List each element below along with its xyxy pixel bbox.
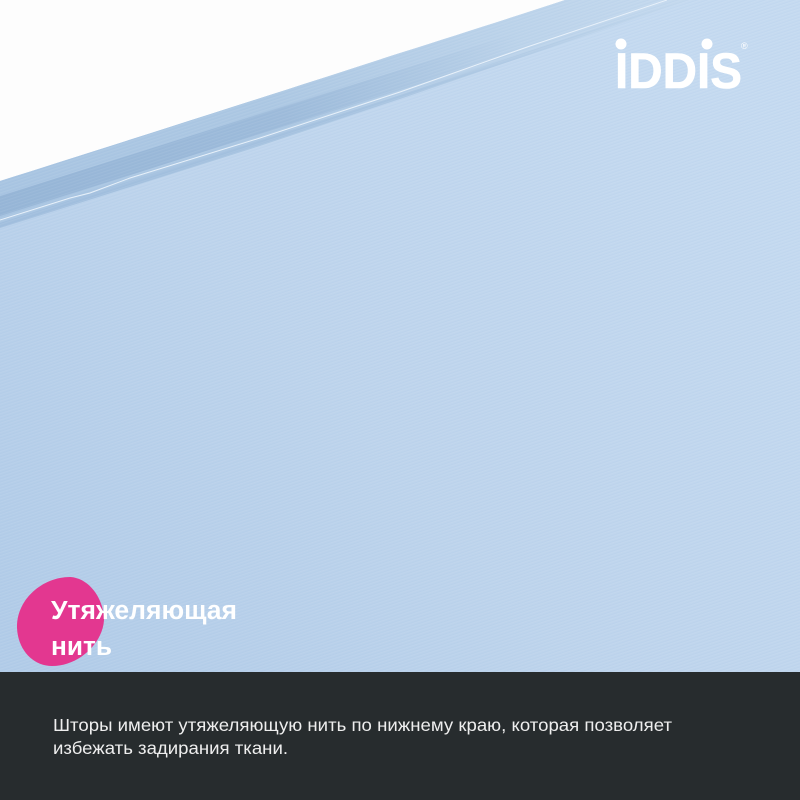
heading: weighting thread: Утяжеляющая bbox=[51, 597, 237, 625]
caption text bbox=[53, 715, 672, 758]
caption text: избежать задирания ткани. bbox=[53, 738, 288, 758]
pink blob accent bbox=[17, 577, 104, 666]
dark caption panel bbox=[0, 672, 800, 800]
logo: IDDIS: IDDIS bbox=[615, 43, 742, 99]
heading: weighting thread bbox=[51, 597, 237, 661]
registered mark: ® bbox=[741, 41, 748, 51]
heading: weighting thread: нить bbox=[51, 633, 112, 661]
curtain hem fold bbox=[0, 0, 610, 228]
hem stitch line bbox=[0, 0, 667, 220]
caption text: Шторы имеют утяжеляющую нить по нижнему краю, которая позволяет bbox=[53, 715, 672, 735]
